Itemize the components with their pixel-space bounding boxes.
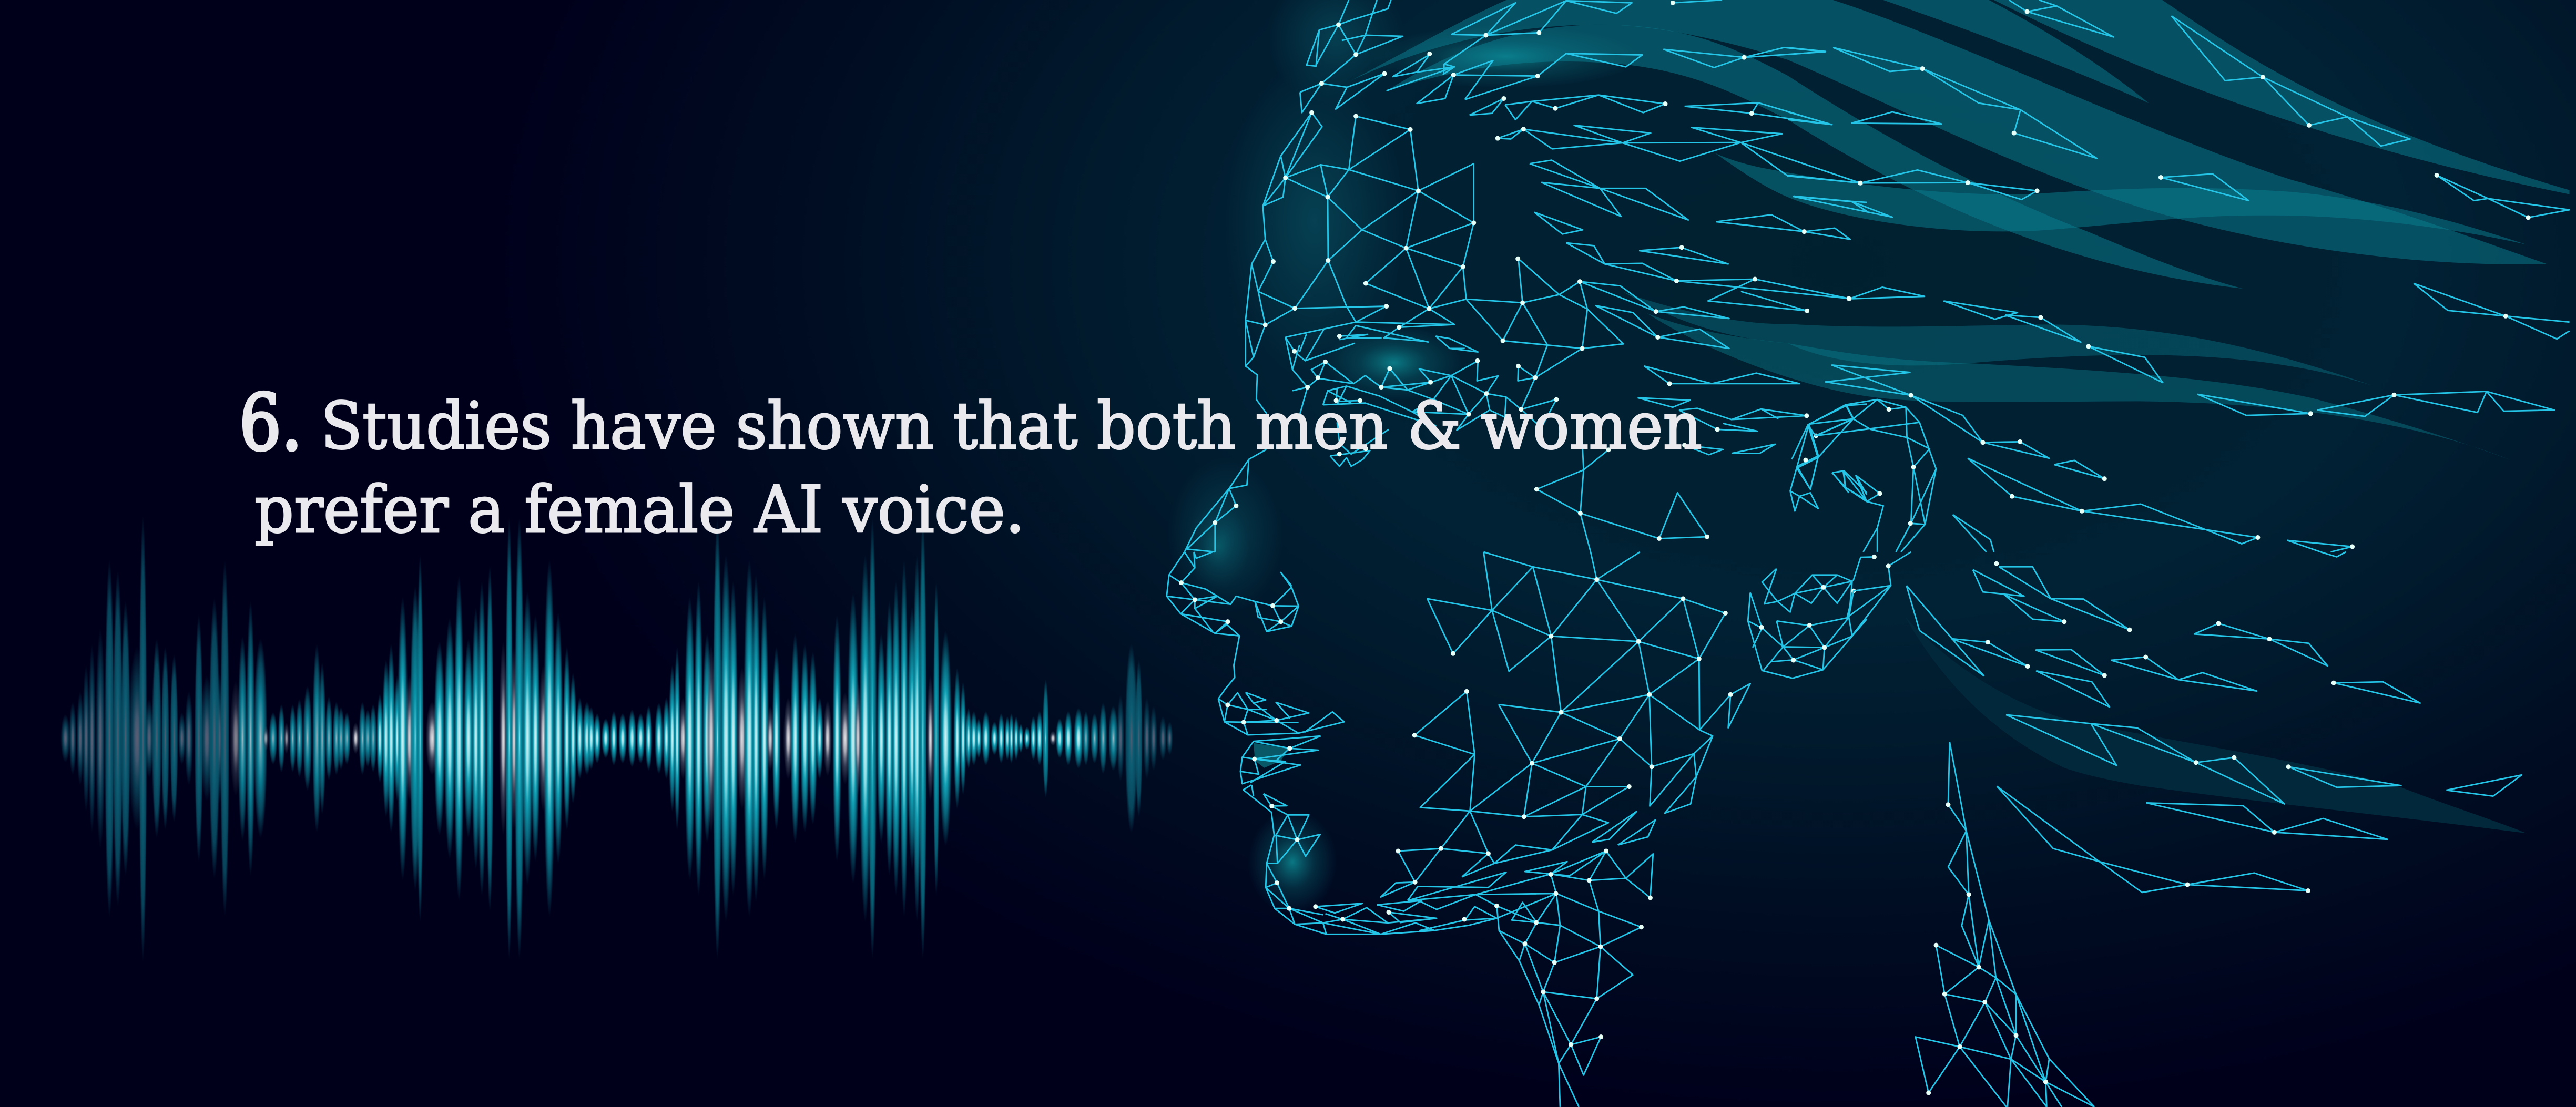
mesh: eye	[1292, 361, 1556, 466]
lip highlight	[1254, 743, 1289, 768]
mesh: upper lip	[1218, 692, 1344, 735]
mesh: lower hair fragments	[1907, 552, 2522, 893]
face and hair polygon mesh, upper left	[1185, 0, 1867, 552]
mesh: hair fragments right	[1788, 0, 2570, 552]
mesh: nose bridge	[1185, 414, 1267, 552]
face glows	[1167, 0, 1643, 915]
mesh: chin	[1243, 785, 1496, 934]
headline line two: prefer a female AI voice.	[254, 473, 1025, 548]
face polygon mesh, lower left	[1167, 552, 1867, 1107]
waveform: central bright section	[471, 518, 793, 959]
mesh: lower lip	[1240, 736, 1321, 784]
mesh: hair fragments	[1387, 0, 1867, 455]
waveform: right tapering section	[790, 518, 1173, 959]
mesh: ear upper left	[1790, 404, 1867, 511]
mesh: forehead	[1246, 112, 1474, 414]
mesh: jaw	[1381, 811, 1653, 999]
mesh nodes: lower right	[1874, 557, 2334, 1093]
mesh: eyebrow	[1286, 322, 1478, 370]
waveform	[60, 515, 1173, 962]
hair swooshes	[1351, 0, 2570, 460]
swoosh: wide crown strand	[1351, 0, 2547, 264]
mesh: throat	[1496, 906, 1601, 1107]
mesh: cheek	[1414, 552, 1750, 845]
mesh: cheekbone	[1536, 423, 1707, 552]
waveform: left dim section	[60, 515, 474, 962]
mesh: nose	[1167, 552, 1299, 699]
mesh: top of head	[1300, 0, 1403, 112]
mesh: ear	[1792, 399, 1936, 552]
swoosh: short strand	[1883, 0, 2149, 103]
hair and neck polygon mesh, lower right	[1847, 552, 2522, 1107]
hair and ear polygon mesh, upper right	[1788, 0, 2570, 552]
mesh: temple	[1466, 259, 1729, 409]
headline text	[239, 378, 1702, 548]
mesh nodes: upper right	[1849, 12, 2528, 547]
mesh nodes: lower left	[1181, 580, 1854, 1044]
swoosh: dark lower hair strand	[1905, 616, 2527, 833]
mesh: ear lobe	[1748, 569, 1867, 678]
swoosh: horizontal strand	[1715, 153, 2527, 244]
swoosh: bright strand	[1387, 25, 2243, 289]
swoosh: lower strand one	[1623, 292, 2372, 385]
mesh: neck	[1916, 742, 2094, 1107]
mesh: ear edge	[1847, 552, 1911, 636]
headline line one: Studies have shown that both men & women	[321, 389, 1702, 464]
number six: 6.	[239, 378, 302, 468]
mesh nodes: upper left	[1215, 3, 1860, 538]
swoosh: lower strand two	[1647, 313, 2512, 460]
swoosh: top long strand	[1994, 0, 2570, 194]
